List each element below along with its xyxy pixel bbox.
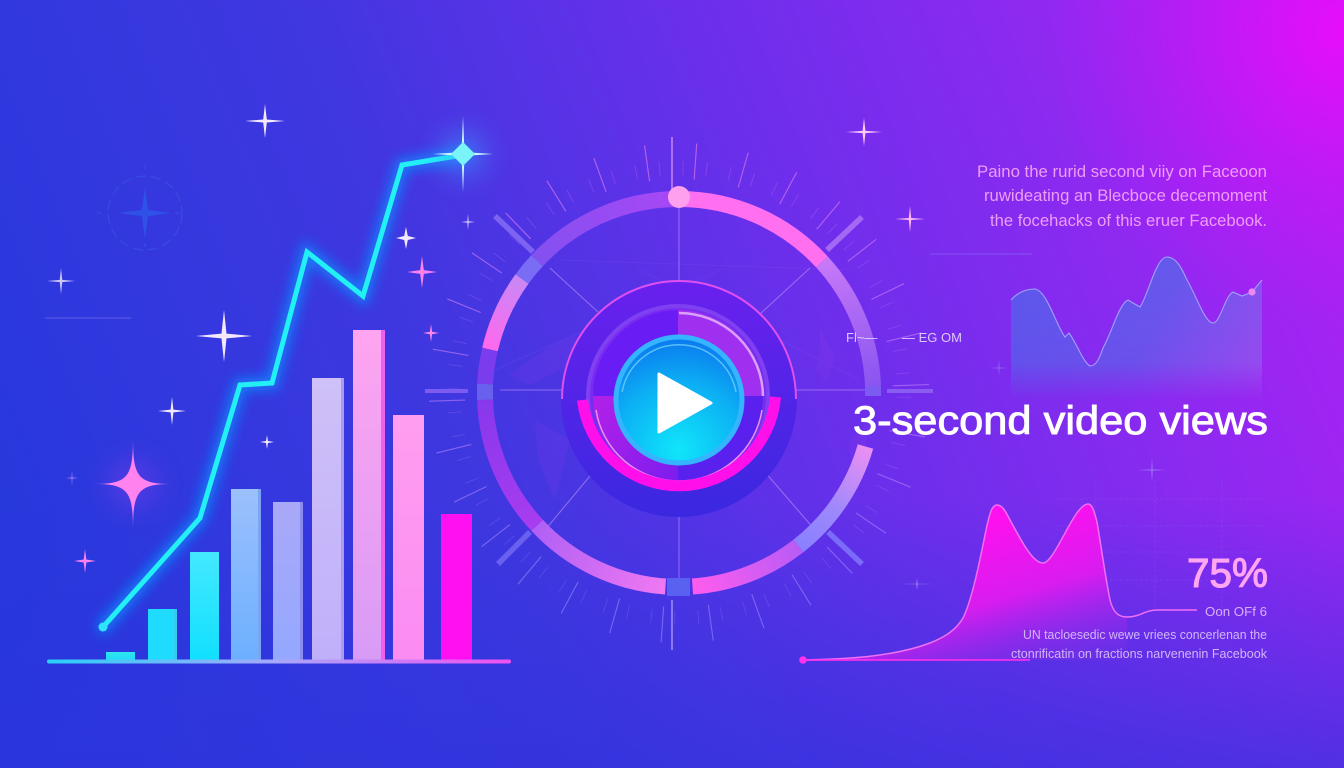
dial: progress ring with play button (425, 137, 933, 650)
play button highlight (622, 345, 736, 392)
top-right paragraph: Paino the rurid second viiy on Faceoon (977, 163, 1267, 181)
top-right paragraph (977, 163, 1267, 230)
bottom-right paragraph: ctonrificatin on fractions narvenenin Facebook (1011, 646, 1267, 661)
faint map shapes and web lines (495, 260, 870, 500)
bottom-right grid (1055, 480, 1270, 610)
stat caption: Oon OFf 6 (1205, 604, 1267, 619)
inner quadrants (593, 310, 763, 481)
bottom-right peak chart (799, 504, 1197, 664)
star field white (47, 104, 925, 449)
thick axis tabs (425, 137, 933, 650)
thin spokes (500, 205, 865, 580)
radial tick marks around dial (447, 161, 911, 625)
top-right paragraph: the focehacks of this eruer Facebook. (990, 212, 1267, 230)
bottom-right paragraph (1011, 627, 1267, 661)
glowing star at line peak (433, 116, 493, 192)
dial side label: Fl~— (846, 330, 877, 345)
dial side label: — EG OM (902, 330, 962, 345)
play triangle (659, 374, 711, 432)
top knob (668, 186, 690, 208)
top-right paragraph: ruwideating an Blecboce decemoment (984, 187, 1267, 205)
bottom-right paragraph: UN tacloesedic wewe vriees concerlenan the (1023, 627, 1267, 642)
star field pink (66, 256, 439, 573)
chart baseline (47, 660, 511, 664)
sparkle stars (45, 104, 1166, 590)
75% stat: 75% (1187, 550, 1268, 596)
magenta arc (582, 397, 776, 486)
faint target star icon (97, 165, 193, 261)
main heading: 3-second video views (853, 399, 1268, 443)
thin pink ring (562, 281, 796, 399)
inner dark disc (561, 281, 797, 517)
outer ring segments (485, 199, 873, 586)
top-right area chart (1011, 257, 1262, 400)
play button circle (616, 337, 742, 463)
rising neon line (98, 155, 463, 632)
bottom blue marker (667, 578, 690, 596)
bar chart (47, 330, 511, 664)
inner band (588, 306, 768, 486)
faint stars (900, 360, 1166, 590)
faint horizontal rules (45, 254, 1032, 318)
